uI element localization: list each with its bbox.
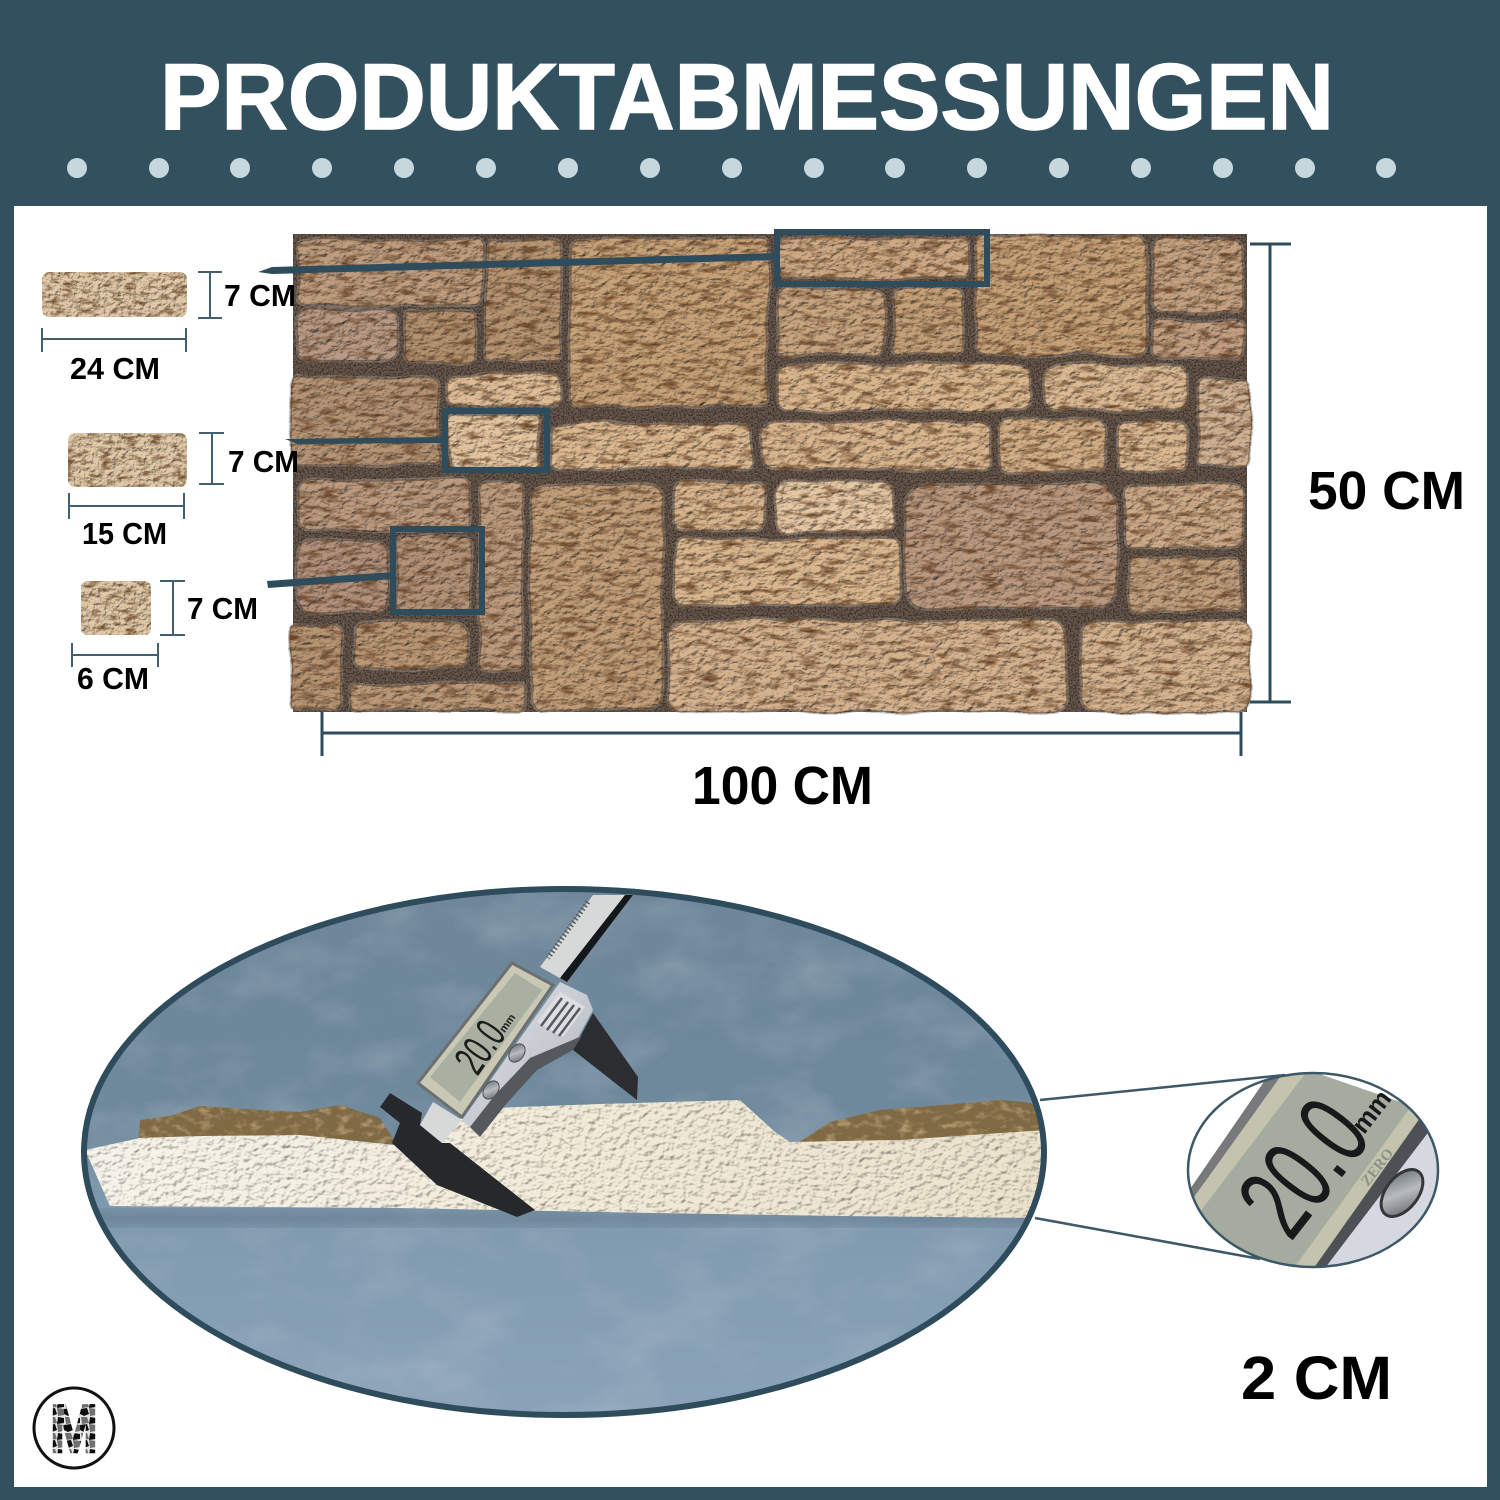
mortar background (293, 234, 1247, 712)
sample brick 15 x 7 cm: 7 CM (228, 444, 299, 479)
dark body underside (470, 1036, 582, 1137)
callout box and leader: 15 cm stone (285, 411, 547, 470)
sample brick 6 x 7 cm (72, 581, 258, 696)
photo contents (80, 885, 1050, 1420)
magnifier connector lines (1035, 1075, 1285, 1259)
silver body (1327, 1134, 1437, 1266)
width dimension 100 cm: 100 CM (692, 756, 873, 816)
display housing (418, 963, 553, 1117)
blue background wall (80, 885, 1050, 1420)
sample brick 24 x 7 cm: 24 CM (70, 351, 160, 386)
shadow under foam panel (90, 1210, 1040, 1226)
sample brick 24 x 7 cm (42, 272, 296, 386)
sample brick 6 x 7 cm: 7 CM (187, 591, 258, 626)
sample brick 6 x 7 cm: 6 CM (77, 661, 149, 696)
beige frame lower (1296, 1110, 1418, 1266)
lower ruler (420, 1102, 462, 1143)
brand logo (34, 1388, 114, 1468)
caliper ruler (540, 895, 633, 982)
lcd (1201, 1074, 1409, 1265)
decorative dotted row (67, 158, 1396, 178)
title: PRODUKTABMESSUNGEN (160, 44, 1334, 149)
magnified lcd lens (1185, 1070, 1445, 1272)
buttons (480, 1041, 528, 1102)
thumb wheel ridges (537, 992, 585, 1037)
thickness label 2 cm: 2 CM (1241, 1344, 1392, 1412)
height dimension 50 cm (1250, 244, 1465, 702)
dark line (1315, 1120, 1428, 1266)
zoomed reading: 20.0 (1216, 1078, 1392, 1257)
sample brick 24 x 7 cm: 7 CM (224, 278, 296, 313)
zoomed unit: mm (1345, 1084, 1397, 1139)
sample brick 15 x 7 cm (68, 433, 299, 551)
foam cross-section (85, 1100, 1045, 1218)
stone wall panel (290, 234, 1250, 712)
lcd reading: 20.0 (445, 1012, 515, 1083)
oval border (84, 889, 1044, 1415)
zoomed button (1380, 1168, 1424, 1218)
width dimension 100 cm (322, 712, 1241, 816)
sample brick 15 x 7 cm: 15 CM (82, 516, 167, 551)
dark frame stripe (1191, 1078, 1280, 1197)
lcd screen (430, 973, 542, 1102)
oval thickness photo (80, 885, 1050, 1420)
brown stone surface (138, 1100, 1040, 1145)
ruler ticks (548, 902, 588, 958)
silver body (462, 982, 593, 1137)
beige frame (1194, 1074, 1304, 1210)
callout box and leader: 24 cm stone (258, 232, 987, 284)
callout box and leader: 6 cm stone (267, 529, 482, 612)
zero label: ZERO (1358, 1146, 1397, 1189)
stones (290, 236, 1250, 712)
lower jaw (380, 1093, 535, 1217)
upper jaw (573, 1013, 638, 1100)
height dimension 50 cm: 50 CM (1308, 461, 1465, 521)
digital caliper (380, 895, 638, 1217)
lcd unit: mm (497, 1012, 518, 1035)
brand logo: M (50, 1391, 98, 1467)
lens border (1188, 1073, 1438, 1267)
